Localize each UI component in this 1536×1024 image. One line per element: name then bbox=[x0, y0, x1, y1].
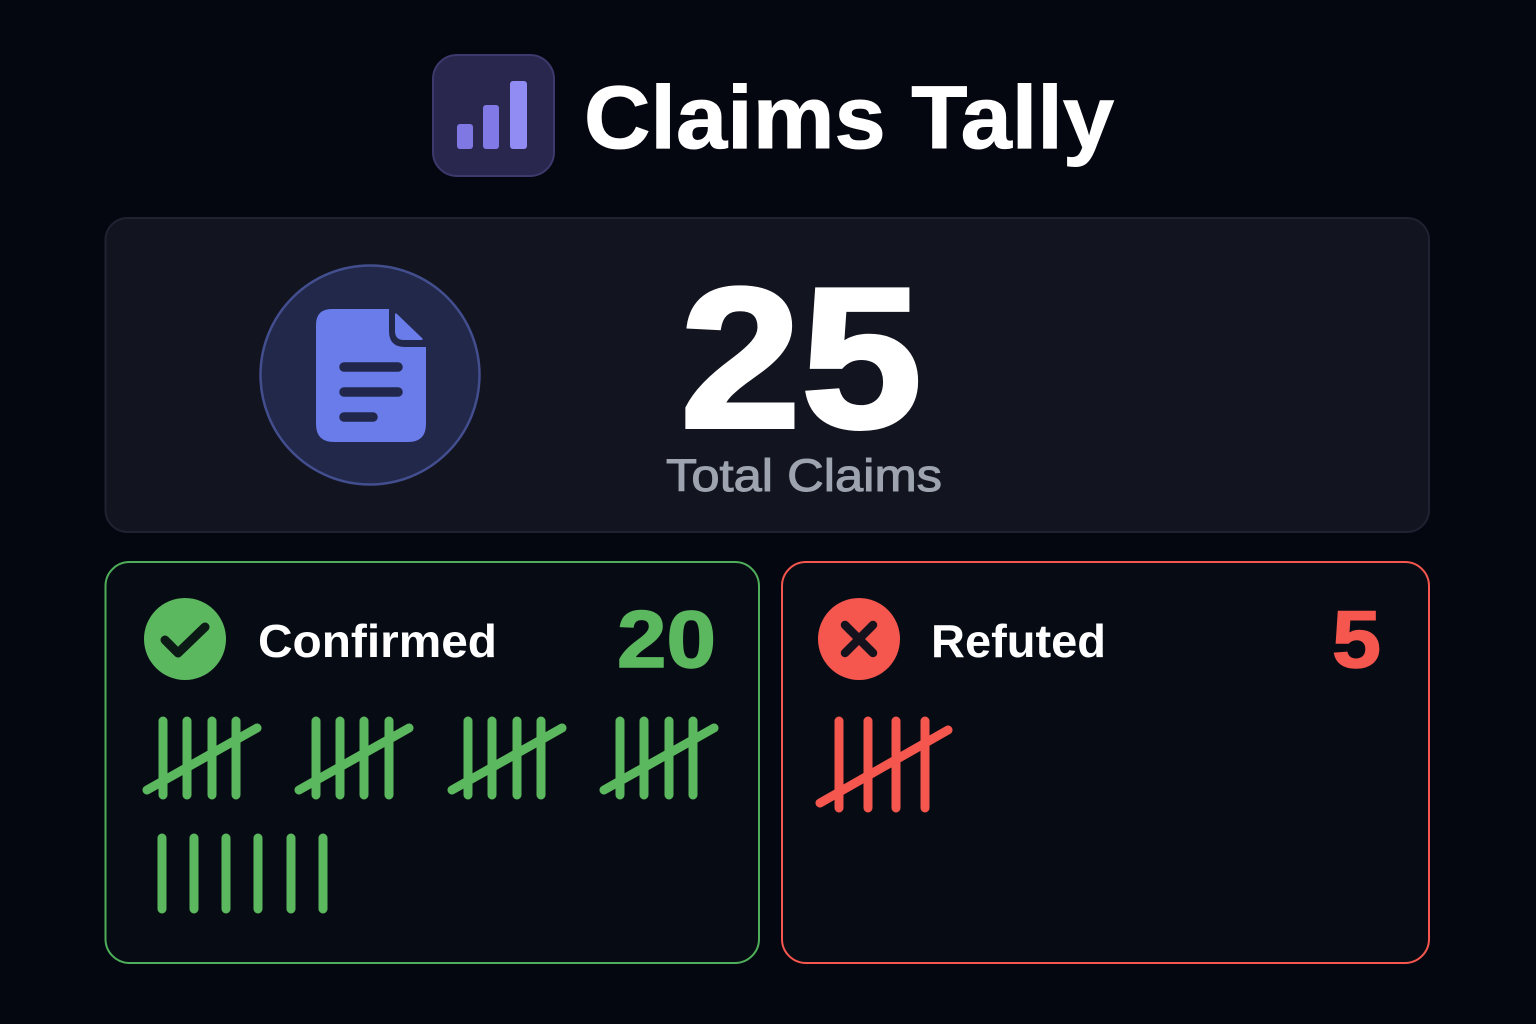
tally group 4 bbox=[604, 721, 714, 795]
title: Claims Tally bbox=[584, 67, 1115, 167]
header: icon and title bbox=[433, 55, 1115, 176]
icon: cross circle bbox=[818, 598, 900, 680]
tally group 2 bbox=[299, 721, 409, 795]
panel: confirmed bbox=[106, 562, 759, 963]
tally group 1 bbox=[147, 721, 257, 795]
panel: refuted bbox=[782, 562, 1429, 963]
total label: Total Claims bbox=[666, 450, 942, 501]
tally row: six single strokes bbox=[162, 838, 323, 909]
refuted count: 5 bbox=[1332, 595, 1381, 685]
refuted label: Refuted bbox=[931, 615, 1106, 667]
icon: bar chart tile bbox=[433, 55, 554, 176]
tally group: five strokes bbox=[820, 721, 948, 808]
confirmed count: 20 bbox=[617, 595, 716, 685]
icon: check circle bbox=[144, 598, 226, 680]
panel: total claims bbox=[106, 218, 1429, 532]
tally group 3 bbox=[452, 721, 562, 795]
icon: document in circle bbox=[260, 266, 480, 484]
confirmed label: Confirmed bbox=[258, 615, 497, 667]
total number: 25 bbox=[680, 247, 922, 470]
